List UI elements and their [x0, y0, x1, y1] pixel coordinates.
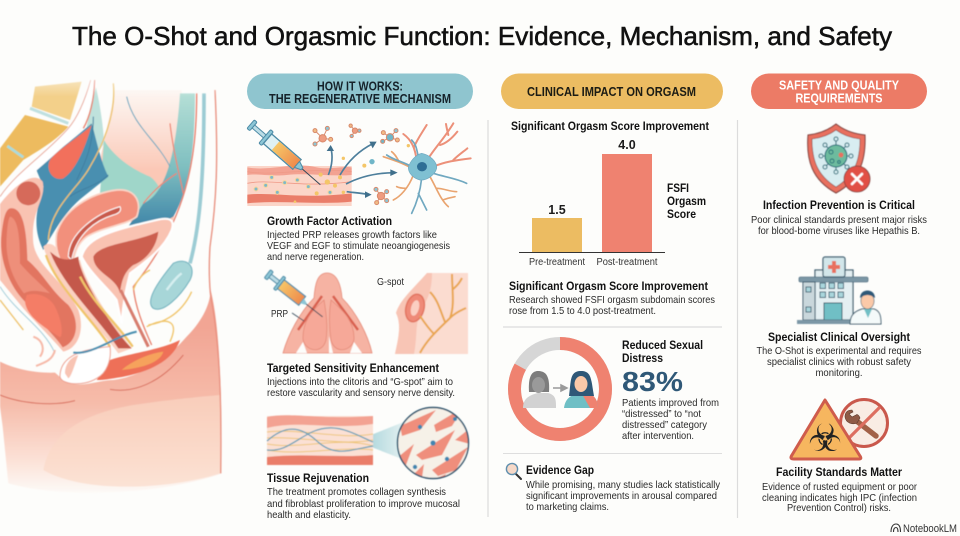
bar chart: FSFI orgasm score: Pre-treatment: [529, 257, 585, 268]
axis label: Orgasm: [667, 194, 706, 208]
text: infection prevention: Poor clinical standards present major risks: [751, 215, 927, 226]
arrows from tissue: [327, 142, 398, 198]
axis label: [667, 181, 706, 221]
text: infection prevention: [751, 198, 927, 237]
icon: relieved woman: [564, 371, 598, 408]
axis label: FSFI: [667, 181, 689, 195]
icon: magnifying glass: [506, 463, 521, 479]
icon: distressed woman: [523, 371, 556, 408]
illustration: targeted injection sites: [262, 267, 468, 354]
label: G-spot: G-spot: [377, 277, 404, 288]
text: infection prevention: for blood-bome viruses like Hepathis B.: [758, 226, 920, 237]
text: targeted sensitivity enhancement: Targeted Sensitivity Enhancement: [267, 361, 439, 375]
section header: safety and quality: REQUIREMENTS: [796, 92, 882, 106]
stat: reduced sexual distress: [622, 338, 719, 442]
stat: reduced sexual distress: distressed” category: [622, 420, 708, 431]
text: targeted sensitivity enhancement: restore vascularity and sensory nerve density.: [267, 388, 455, 399]
tissue layers: [267, 415, 373, 465]
arrow: [553, 385, 567, 391]
clitoris anatomy: [283, 273, 372, 353]
icon: biohazard warning triangle: [791, 400, 861, 460]
bar: pre-treatment 1.5: 1.5: [548, 203, 566, 217]
donut chart: 83 percent: [514, 344, 606, 434]
icon: small syringe: [262, 267, 328, 323]
text: specialist oversight: [756, 330, 922, 379]
G-spot detail panel: [395, 273, 468, 354]
text: growth factor activation: VEGF and EGF to stimulate neoangiogenesis: [267, 241, 450, 252]
text: facility standards: Prevention Control) risks.: [787, 503, 891, 514]
section header: clinical impact: [501, 74, 723, 109]
icon: neuron: [383, 123, 471, 213]
text: evidence gap: to marketing claims.: [526, 502, 609, 513]
stat: reduced sexual distress: Reduced Sexual: [622, 338, 703, 352]
text: infection prevention: Infection Prevention is Critical: [763, 198, 915, 212]
magnification cone: [356, 421, 406, 459]
text: specialist oversight: monitoring.: [816, 368, 862, 379]
illustration: pelvic anatomy cross-section: [0, 60, 240, 493]
text: growth factor activation: [267, 214, 450, 263]
icon: no-wrench sign: [840, 400, 888, 446]
text: facility standards: Evidence of rusted equipment or poor: [762, 482, 917, 493]
text: evidence gap: While promising, many studies lack statistically: [526, 480, 721, 491]
axis label: Score: [667, 207, 696, 221]
text: orgasm score improvement: Research showed FSFI orgasm subdomain scores: [509, 295, 715, 306]
icon: hospital with doctor: [797, 257, 881, 324]
text: evidence gap: significant improvements in arousal compared: [526, 491, 717, 502]
illustration: tissue layers with magnified fibroblasts: [266, 406, 470, 480]
text: orgasm score improvement: rose from 1.5 to 4.0 post-treatment.: [509, 306, 656, 317]
text: growth factor activation: Injected PRP releases growth factors like: [267, 230, 437, 241]
text: facility standards: cleaning indicates high IPC (infection: [762, 493, 917, 504]
text: orgasm score improvement: [509, 279, 715, 317]
bar: post-treatment 4.0: [602, 138, 652, 252]
icon: syringe: [245, 117, 326, 191]
stat: reduced sexual distress: Patients improved from: [622, 398, 719, 409]
line: PRP pointer: [292, 313, 304, 321]
section header: safety and quality: SAFETY AND QUALITY: [779, 78, 900, 92]
stat: reduced sexual distress: Distress: [622, 351, 663, 365]
label: PRP: PRP: [271, 309, 288, 320]
text: facility standards: Facility Standards Matter: [776, 465, 902, 479]
text: tissue rejuvenation: Tissue Rejuvenation: [267, 471, 369, 485]
text: tissue rejuvenation: health and elasticity.: [267, 510, 351, 521]
text: growth factor activation: and nerve regeneration.: [267, 252, 364, 263]
section header: clinical impact: CLINICAL IMPACT ON ORGASM: [527, 85, 696, 99]
text: specialist oversight: Specialist Clinical Oversight: [768, 330, 910, 344]
text: tissue rejuvenation: and fibroblast proliferation to improve mucosal: [267, 499, 460, 510]
illustration: growth factor activation: [245, 117, 471, 213]
bar: post-treatment 4.0: 4.0: [618, 138, 636, 152]
stat: reduced sexual distress: “distressed” to “not: [622, 409, 701, 420]
bar: pre-treatment 1.5: [532, 203, 582, 252]
magnified fibroblast lens: [396, 406, 470, 480]
text: tissue rejuvenation: The treatment promotes collagen synthesis: [267, 487, 446, 498]
tissue band: [247, 144, 410, 206]
text: evidence gap: Evidence Gap: [526, 463, 594, 477]
section header: safety and quality: [751, 74, 927, 109]
text: specialist oversight: specialist clinics with robust safety: [767, 357, 912, 368]
heading: chart title: Significant Orgasm Score Improvement: [511, 119, 709, 133]
bar chart: FSFI orgasm score: [519, 138, 706, 268]
section header: how it works: THE REGENERATIVE MECHANISM: [269, 92, 451, 106]
text: orgasm score improvement: Significant Orgasm Score Improvement: [509, 279, 708, 293]
text: specialist oversight: The O-Shot is experimental and requires: [756, 346, 922, 357]
stat: reduced sexual distress: after intervention.: [622, 431, 694, 442]
title: The O-Shot and Orgasmic Function: Evidence, Mechanism, and Safety: [72, 21, 892, 51]
text: growth factor activation: Growth Factor Activation: [267, 214, 392, 228]
icon: shield with virus: [808, 124, 870, 193]
icon: biohazard warning triangle: ☣: [808, 416, 842, 460]
text: evidence gap: [526, 463, 721, 513]
text: targeted sensitivity enhancement: [267, 361, 455, 399]
bar chart: FSFI orgasm score: Post-treatment: [596, 257, 658, 268]
section header: how it works: HOW IT WORKS:: [317, 80, 403, 94]
molecules: [313, 124, 399, 205]
text: facility standards: [762, 465, 917, 514]
text: targeted sensitivity enhancement: Injections into the clitoris and “G-spot” aim to: [267, 377, 453, 388]
section header: how it works: [247, 74, 473, 109]
stat: reduced sexual distress: 83%: [622, 366, 683, 397]
text: tissue rejuvenation: [267, 471, 460, 521]
